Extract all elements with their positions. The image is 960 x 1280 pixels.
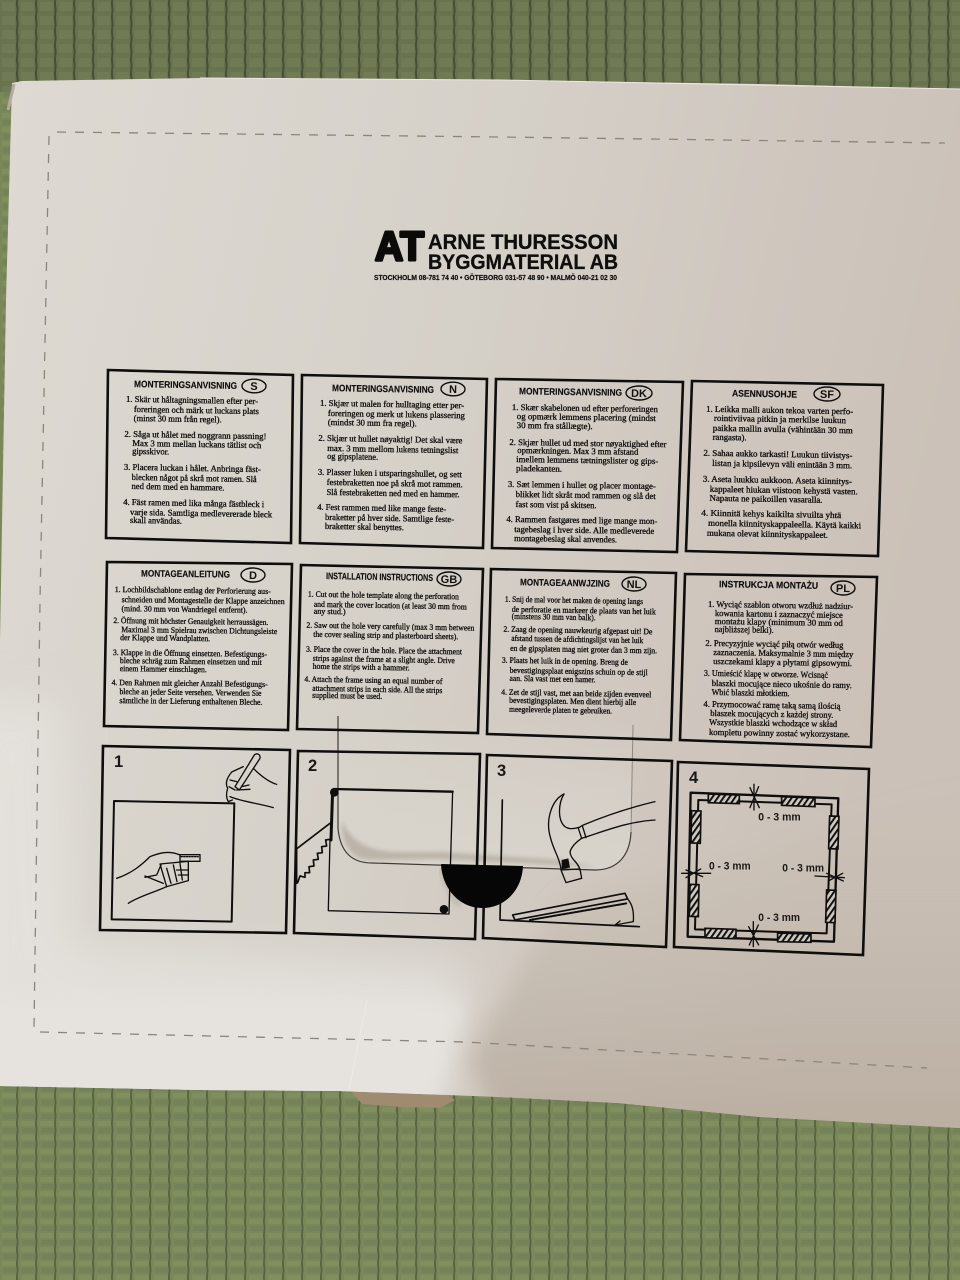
text block: steps: bleche schräg zum Rahmen einsetzen und mit: [120, 656, 263, 667]
panel: Polish instructions PL: [680, 574, 877, 747]
step number 1: 1: [114, 753, 123, 771]
text block: steps: (minst 30 mm från regel).: [134, 413, 222, 424]
heading: MONTAGEANLEITUNG: [141, 567, 230, 580]
panel frame: [487, 569, 676, 740]
text block: steps: 3. Klappe in die Öffnung einsetzen. Befestigungs-: [113, 648, 267, 659]
text block: steps: [501, 595, 658, 716]
text block: steps: aan. Sla vast met een hamer.: [510, 674, 596, 684]
company name line 2: BYGGMATERIAL AB: [428, 251, 618, 274]
text block: steps: 30 mm fra stållægte).: [517, 420, 593, 431]
text block: steps: varje sida. Samtliga medlevererade bleck: [130, 507, 273, 519]
badge DK: DK: [631, 388, 647, 400]
text block: steps: 4. Rammen fastgøres med lige mange mon-: [506, 514, 658, 526]
torn corrugated cardboard patch: [348, 1088, 455, 1108]
text block: steps: ned dem med en hammare.: [131, 481, 225, 493]
text block: steps: schneiden und Montagestelle der Klappe anzeichnen: [122, 595, 285, 606]
text block: steps: bevestigingsplaten. Men dient hierbij alle: [509, 696, 637, 707]
panel frame: [492, 379, 683, 552]
text block: steps: foreringen och märk ut luckans plats: [134, 404, 260, 416]
text block: steps: de perforatie en markeer de plaats van het luik: [512, 605, 657, 616]
text block: steps: kompletu powinny zostać wykorzystane.: [709, 727, 850, 739]
text block: steps: mukana olevat kiinnityskappaleet.: [707, 528, 828, 540]
text block: steps: [111, 585, 285, 707]
panel frame: [674, 762, 869, 955]
heading: MONTAGEAANWJZING: [520, 576, 610, 589]
text block: steps: bleche an jeder Seite versehen. Verwenden Sie: [119, 687, 262, 698]
badge D: [241, 568, 265, 582]
badge D: D: [249, 570, 257, 582]
diagram 4: frame with attachment strips: [674, 762, 869, 955]
text block: steps: 1. Snij de mal voor het maken de opening langs: [505, 595, 643, 606]
text block: steps: 2. Öffnung mit höchster Genauigkeit herraussägen.: [113, 616, 268, 627]
text block: steps: 2. Skjær hullet ud med stor nøyaktighed efter: [509, 437, 667, 449]
text block: steps: monella kiinnityskappaleella. Käytä kaikki: [708, 518, 862, 530]
text block: steps: [506, 402, 667, 545]
text block: steps: 4. Attach the frame using an equal number of: [304, 675, 443, 686]
text block: steps: [123, 394, 275, 527]
panel frame: [104, 562, 292, 730]
panel frame: [297, 565, 483, 733]
text block: steps: Slå festebraketten ned med en hammer.: [326, 487, 460, 499]
text block: steps: 1. Skær skabelonen ud efter perforeringen: [512, 402, 659, 414]
panel: English instructions GB: [297, 565, 483, 733]
text block: steps: imellem lemmens tætningslister og gips-: [516, 454, 658, 466]
text block: steps: blikket lidt skråt mod rammen og slå det: [516, 489, 656, 501]
text block: steps: 1. Skär ut håltagningsmallen efter per-: [126, 394, 258, 406]
text block: steps: [304, 590, 475, 703]
text block: steps: 2. Saw out the hole very carefully (max 3 mm between: [306, 621, 474, 633]
heading: MONTERINGSANVISNING: [519, 385, 622, 398]
heading: ASENNUSOHJE: [732, 387, 797, 400]
contact phone numbers: STOCKHOLM 08-781 74 40 • GÖTEBORG 031-57 48 90 • MALMÖ 040-21 02 30: [374, 273, 617, 282]
text block: steps: pladekanten.: [516, 463, 562, 474]
text block: steps: bevestigingsplaat enigszins schuin op de stijl: [510, 666, 648, 677]
text block: steps: rointiviivaa pitkin ja merkilse luukun: [714, 413, 847, 425]
panel frame: [294, 751, 480, 939]
text block: steps: 4. Fest rammen med like mange feste-: [317, 502, 446, 514]
text block: steps: foreringen og merk ut lukens plassering: [328, 408, 466, 420]
text block: steps: braketter skal benyttes.: [325, 521, 404, 532]
text block: steps: tagebeslag i hver side. Alle medleverede: [514, 524, 654, 536]
text block: steps: [701, 404, 864, 540]
text block: steps: blecken något på skrå mot ramen. Slå: [132, 472, 257, 484]
text block: steps: 1. Wyciąć szablon otworu wzdłuż nadziur-: [708, 599, 853, 611]
illustration: double frame, strips and gap marks: 0 - 3 mm: [758, 912, 800, 924]
text block: steps: 3. Umieścić klapę w otworze. Wcisnąć: [704, 668, 828, 680]
text block: steps: any stud.): [314, 607, 346, 616]
panel: Swedish instructions S: [106, 370, 293, 543]
badge S: [242, 379, 266, 393]
text block: steps: najbliższej belki).: [715, 624, 774, 635]
text block: steps: Napauta ne paikoillen vasaralla.: [710, 493, 823, 505]
text block: steps: 3. Place the cover in the hole. Place the attachment: [306, 645, 463, 656]
text block: steps: der Klappe und Wandplatten.: [120, 633, 210, 643]
text block: steps: paikka mallin avulla (vähintään 30 mm: [713, 423, 853, 435]
badge N: N: [449, 384, 457, 396]
illustration: hammer and wedge: [500, 794, 655, 927]
gap markers: [750, 784, 759, 810]
badge N: [441, 382, 465, 396]
text block: steps: 4. Przymocować ramę taką samą ilością: [703, 699, 841, 711]
text block: steps: einem Hammer einschlagen.: [120, 664, 207, 674]
text block: steps: opmærkningen. Max 3 mm afstand: [517, 445, 639, 457]
text block: steps: 3. Plaats het luik in de opening. Breng de: [502, 656, 628, 667]
text block: steps: braketter på hver side. Samtlige feste-: [325, 512, 454, 524]
text block: steps: skall användas.: [130, 515, 182, 526]
badge GB: GB: [441, 574, 457, 586]
badge NL: NL: [627, 579, 642, 591]
text block: steps: meegeleverde platen te gebruiken.: [509, 705, 612, 716]
text block: steps: 1. Skjær ut malen for hulltaging etter per-: [320, 398, 464, 410]
text block: steps: the cover sealing strip and plasterboard sheets).: [313, 630, 458, 641]
illustration: double frame, strips and gap marks: 0 - 3 mm: [782, 863, 824, 875]
text block: steps: en de gipsplaten mag niet groter dan 3 mm zijn.: [510, 644, 657, 655]
text block: steps: (mindst 30 mm fra regel).: [328, 417, 417, 428]
text block: steps: kowania kartonu i zaznaczyć miejsce: [715, 608, 843, 620]
step number 3: 3: [497, 762, 506, 780]
text block: steps: 4. Fäst ramen med lika många fästbleck i: [123, 497, 265, 509]
text block: steps: 3. Plasser luken i utsparingshullet, og sett: [318, 467, 463, 479]
text block: steps: montagebeslag skal anvendes.: [514, 533, 617, 544]
text block: steps: afstand tussen de afdichtingslijst van het luik: [511, 634, 644, 645]
text block: steps: home the strips with a hammer.: [313, 662, 410, 672]
step number 4: 4: [689, 769, 699, 787]
text block: steps: Wszystkie blaszki wchodzące w skład: [709, 717, 838, 729]
logo mark: AT: AT: [375, 223, 424, 269]
illustration: double frame, strips and gap marks: [682, 784, 844, 947]
badge PL: PL: [836, 583, 850, 595]
text block: steps: 2. Såga ut hålet med noggrann passning!: [124, 429, 267, 441]
text block: steps: 2. Precyzyjnie wyciąć piłą otwór według: [705, 638, 844, 650]
text block: steps: blaszek mocujących z każdej strony.: [710, 708, 833, 720]
panel frame: [483, 755, 672, 947]
diagram 1: marking the hole with template: [100, 746, 290, 933]
text block: steps: Wbić blaszki młotkiem.: [712, 687, 790, 698]
text block: steps: blaszki mocujące nieco ukośnie do ramy.: [712, 678, 852, 690]
text block: steps: zaznaczenia. Maksymalnie 3 mm między: [713, 647, 854, 659]
text block: steps: (mind. 30 mm von Wandriegel entfernt).: [121, 604, 248, 615]
logo: Arne Thuresson Byggmaterial AB: [374, 223, 618, 282]
text block: steps: (minstens 30 mm van balk).: [512, 612, 596, 622]
text block: steps: 1. Leikka malli aukon tekoa varten perfo-: [706, 404, 853, 416]
black half-circle thumb notch: [441, 864, 523, 908]
text block: steps: 1. Lochbildschablone entlag der Perforierung aus-: [115, 585, 271, 596]
text block: steps: supplied must be used.: [312, 691, 382, 701]
panel: Danish instructions DK: [492, 379, 683, 552]
text block: steps: og gipsplatene.: [327, 451, 378, 462]
text block: steps: 3. Sæt lemmen i hullet og placer montage-: [508, 479, 656, 491]
text block: steps: 2. Sahaa aukko tarkasti! Luukun tiivistys-: [703, 448, 853, 460]
perforation dashed line: [34, 132, 945, 1068]
heading: INSTALLATION INSTRUCTIONS: [326, 570, 433, 583]
text block: steps: 4. Kiinnitä kehys kaikilta sivuilta yhtä: [701, 508, 842, 520]
text block: steps: 2. Zaag de opening nauwkeurig afgepast uit! De: [503, 625, 653, 636]
badge SF: [814, 387, 840, 401]
text block: steps: rangasta).: [713, 432, 747, 442]
text block: steps: max. 3 mm mellom lukens tetningslist: [327, 443, 459, 455]
text block: steps: 4. Den Rahmen mit gleicher Anzahl Befestigungs-: [112, 678, 268, 689]
text block: steps: 1. Cut out the hole template along the perforation: [308, 590, 459, 601]
text block: steps: montażu klapy (minimum 30 mm od: [715, 616, 843, 628]
panel frame: [680, 574, 877, 747]
saw: [297, 823, 330, 883]
panel: German instructions D: [104, 562, 292, 730]
text block: steps: kappaleet hiukan viistoon kehystä vasten.: [710, 484, 858, 496]
company name line 1: ARNE THURESSON: [428, 231, 618, 254]
text block: steps: uszczekami klapy a płytami gipsowymi.: [713, 656, 852, 668]
badge SF: SF: [820, 389, 834, 401]
cut-out flap outline: [338, 716, 633, 905]
text block: steps: [703, 599, 855, 739]
badge DK: [626, 386, 652, 400]
heading: INSTRUKCJA MONTAŻU: [719, 578, 818, 591]
panel: Norwegian instructions N: [300, 375, 487, 548]
illustration: template and hands: [112, 754, 277, 922]
text block: steps: sämtliche in der Lieferung enthaltenen Bleche.: [119, 696, 262, 707]
corner dot top-left: [330, 788, 339, 797]
text block: steps: listan ja kipsilevyn väli enintään 3 mm.: [712, 458, 852, 470]
text block: steps: festebraketten noe på skrå mot rammen.: [327, 477, 463, 489]
illustration: double frame, strips and gap marks: 0 - 3 mm: [709, 860, 751, 872]
heading: MONTERINGSANVISNING: [134, 378, 237, 391]
panel frame: [100, 746, 290, 933]
heading: MONTERINGSANVISNING: [332, 382, 434, 395]
diagram 2: sawing out the hole: [294, 751, 480, 939]
text block: steps: Maximal 3 mm Spielrau zwischen Dichtungsleiste: [121, 625, 278, 636]
text block: steps: 3. Aseta luukku aukkoon. Aseta kiinnitys-: [703, 474, 852, 486]
corner dot bottom-right: [440, 905, 448, 914]
text block: steps: fast som vist på skitsen.: [516, 499, 597, 510]
panel: Dutch instructions NL: [487, 569, 676, 740]
step number 2: 2: [308, 757, 317, 775]
text block: steps: 3. Placera luckan i hålet. Anbringa fäst-: [124, 462, 261, 474]
panel: Finnish instructions SF: [686, 381, 883, 556]
panel frame: [106, 370, 293, 543]
gap labels: 0 - 3 mm: [758, 811, 801, 823]
panel frame: [686, 381, 883, 556]
diagram 3: hammering strips: [483, 755, 672, 947]
text block: steps: og opmærk lemmens placering (mindst: [517, 411, 656, 423]
text block: steps: Max 3 mm mellan luckans tätlist och: [132, 438, 262, 450]
badge S: S: [250, 381, 258, 393]
text block: steps: gipsskivor.: [132, 446, 169, 457]
text block: steps: attachment strips in each side. All the strips: [312, 684, 442, 695]
text block: steps: and mark the cover location (at least 30 mm from: [314, 600, 467, 611]
badge PL: [831, 581, 855, 595]
text block: steps: 2. Skjær ut hullet nøyaktig! Det skal være: [318, 433, 463, 445]
hatched strips: [689, 794, 839, 942]
text block: steps: [317, 398, 466, 533]
text block: steps: 4. Zet de stijl vast, met aan beide zijden evenveel: [501, 688, 652, 699]
illustration: saw and marked frame: [297, 788, 453, 914]
text block: steps: strips against the frame at a slight angle. Drive: [313, 654, 455, 665]
badge GB: [437, 572, 461, 586]
panel frame: [300, 375, 487, 548]
badge NL: [622, 577, 646, 591]
